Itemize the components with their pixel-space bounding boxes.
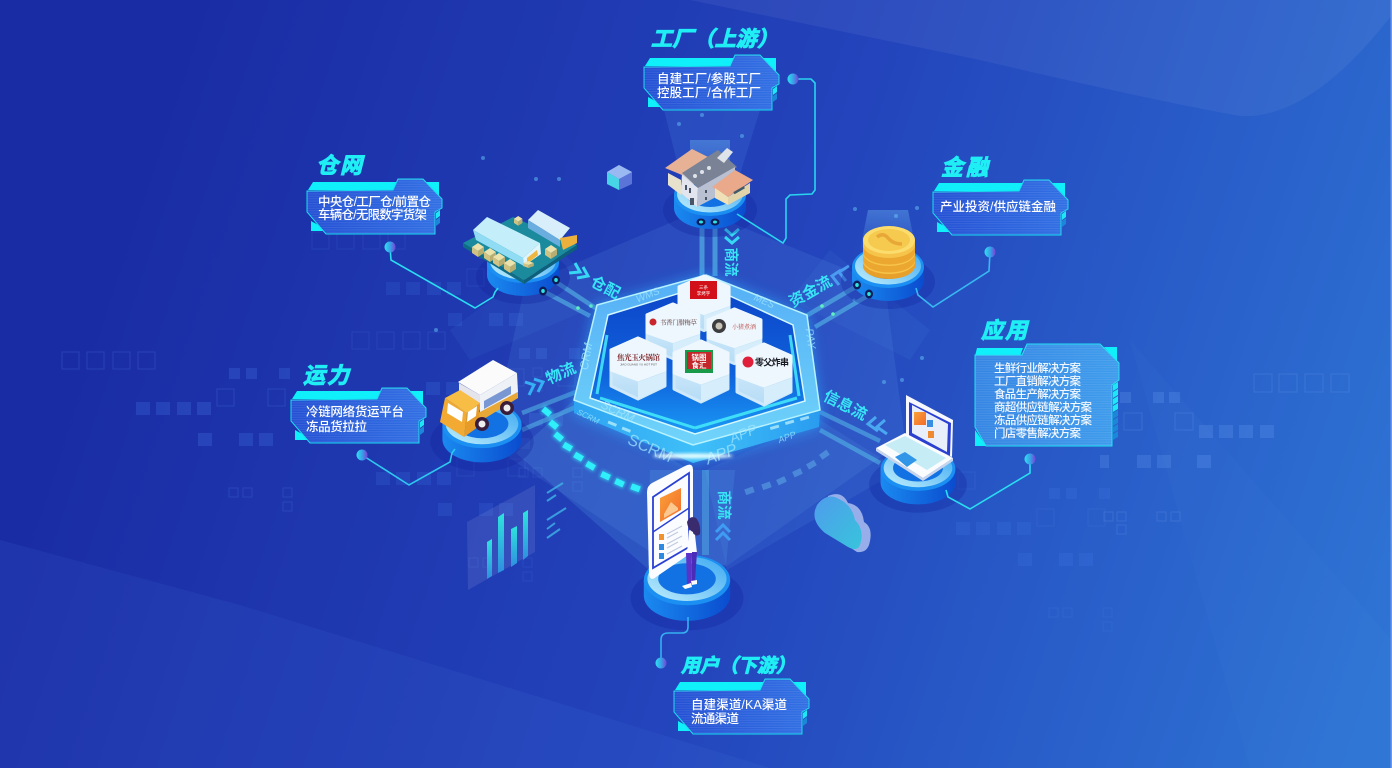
panel text: 控股工厂/合作工厂	[657, 85, 761, 100]
panel text: 冻品供应链解决方案	[994, 413, 1092, 427]
right pixel squares	[1100, 374, 1349, 534]
connector line: laptop	[946, 454, 1036, 509]
pedestal: factory	[663, 174, 757, 237]
panel text: 中央仓/工厂仓/前置仓	[318, 194, 431, 209]
panel shape	[975, 344, 1119, 446]
panel: 运力	[291, 363, 426, 443]
platform labels: SCRM	[576, 408, 601, 426]
panel text: 流通渠道	[691, 711, 739, 726]
brand block: red seal logo: 三条	[699, 284, 708, 290]
panel text: 门店零售解决方案	[994, 426, 1082, 440]
platform labels: APP	[726, 420, 760, 446]
panel: 仓网	[307, 153, 442, 234]
flow arrow: 商流 top	[722, 229, 740, 277]
panel: 金融	[933, 155, 1068, 235]
platform side details	[608, 416, 809, 433]
flow arrow: 信息流	[820, 386, 887, 434]
panel text: 生鲜行业解决方案	[994, 361, 1082, 375]
platform labels: PAY	[803, 328, 817, 350]
glowing ring of squares	[540, 405, 830, 495]
panel text: 冻品货拉拉	[306, 419, 367, 434]
connector line: warehouse	[384, 242, 498, 308]
platform labels: APP	[703, 441, 740, 469]
panel text	[691, 697, 787, 726]
pedestal: laptop	[869, 447, 967, 513]
connector: user beam	[648, 470, 735, 565]
brand block: 锅图食汇: 食汇	[692, 360, 707, 370]
platform labels: SCRM	[599, 397, 637, 425]
pedestal: user	[631, 555, 743, 630]
connector line: truck	[356, 449, 455, 485]
brand block: 小猪: 小猪煮酒	[732, 323, 756, 331]
flow arrow: 资金流: 资金流	[785, 271, 836, 311]
panel: 工厂（上游）	[644, 27, 779, 110]
pedestal: warehouse	[476, 241, 570, 304]
panel text	[306, 404, 404, 434]
panel text: 车辆仓/无限数字货架	[318, 207, 427, 222]
flow arrow: 物流: 物流	[543, 358, 579, 388]
platform well	[590, 285, 805, 434]
heading: 工厂（上游）	[651, 27, 778, 51]
heading: 运力	[303, 363, 351, 388]
person	[682, 517, 700, 589]
panel text: 自建工厂/参股工厂	[657, 71, 761, 86]
brand block: 小猪	[708, 309, 762, 364]
central light field	[450, 210, 930, 585]
brand block: 零父炸串: 零父炸串	[755, 356, 789, 368]
scattered light dots	[434, 113, 924, 384]
brand block: 书香门: 书香门腊梅草	[660, 318, 698, 326]
panel: 用户（下游）	[674, 655, 809, 734]
pedestal: finance	[841, 246, 935, 309]
brand block: red seal logo	[679, 276, 730, 331]
connector line: factory	[737, 74, 815, 243]
flow arrow: 仓配: 仓配	[587, 272, 624, 303]
connector: laptop beams	[820, 412, 880, 463]
heading: 仓网	[316, 153, 365, 178]
flow arrow: 商流 bottom	[715, 490, 733, 540]
panel text: 冷链网络货运平台	[306, 404, 404, 419]
platform labels: APP	[776, 429, 797, 445]
brand block: 焦光玉火锅馆: JIAO GUANG YU HOT POT	[620, 362, 657, 366]
panel text	[318, 194, 431, 222]
brand block: 书香门	[647, 304, 700, 359]
icon: gold coins	[863, 226, 915, 279]
icon: bar chart card	[467, 483, 566, 590]
heading: 应用	[981, 318, 1030, 343]
panel text	[994, 361, 1092, 440]
heading: 金融	[941, 155, 991, 180]
platform labels: CRM	[577, 342, 595, 371]
panel: 应用	[975, 318, 1119, 446]
brand block: 焦光玉火锅馆: 焦光玉火锅馆	[617, 352, 660, 362]
connector: warehouse beams	[543, 282, 600, 316]
icon: tablet with person	[647, 465, 700, 589]
panel text: 食品生产解决方案	[994, 387, 1082, 401]
flow arrow: 物流	[525, 358, 579, 395]
platform labels: WMS	[635, 286, 662, 305]
icon: delivery truck	[440, 360, 518, 437]
connector: factory beams	[664, 110, 760, 276]
flow arrow: 资金流	[785, 266, 849, 311]
flow arrow: 仓配	[569, 263, 624, 303]
platform inner glow strips	[597, 335, 799, 428]
panel text: 自建渠道/KA渠道	[691, 697, 787, 712]
platform labels: SCRM	[625, 432, 675, 466]
pedestal: truck	[430, 402, 534, 471]
platform labels	[576, 286, 817, 469]
icon: warehouse and truck	[463, 210, 577, 284]
panel text: 工厂直销解决方案	[994, 374, 1082, 388]
brand block: 焦光玉火锅馆	[611, 338, 666, 399]
panel text	[657, 71, 761, 100]
connector line: finance	[916, 246, 996, 307]
icon: isometric cube	[607, 165, 632, 190]
platform side face	[574, 400, 820, 463]
platform rim	[574, 275, 820, 445]
brand block: 锅图食汇	[674, 341, 729, 402]
brand block: 锅图食汇: 锅图	[692, 352, 706, 362]
connector: finance beams	[806, 210, 916, 327]
panel text: 商超供应链解决方案	[994, 400, 1092, 414]
icon: cloud	[814, 494, 871, 552]
connector: truck beams	[522, 392, 576, 430]
flow arrow: 信息流: 信息流	[820, 386, 871, 424]
background pixel squares	[62, 232, 1112, 631]
brand block: 零父炸串	[737, 344, 792, 405]
connector line: user	[656, 617, 688, 668]
panel text: 产业投资/供应链金融	[940, 199, 1056, 214]
heading: 用户（下游）	[681, 655, 795, 677]
platform labels: MES	[752, 292, 776, 311]
flow arrow: 商流 top: 商流	[722, 248, 740, 277]
icon: factory	[665, 148, 753, 207]
flow arrow: 商流 bottom: 商流	[715, 490, 733, 520]
icon: laptop	[876, 395, 953, 481]
brand block: red seal logo: 李烤字	[697, 290, 711, 297]
central hexagon platform	[574, 275, 820, 469]
